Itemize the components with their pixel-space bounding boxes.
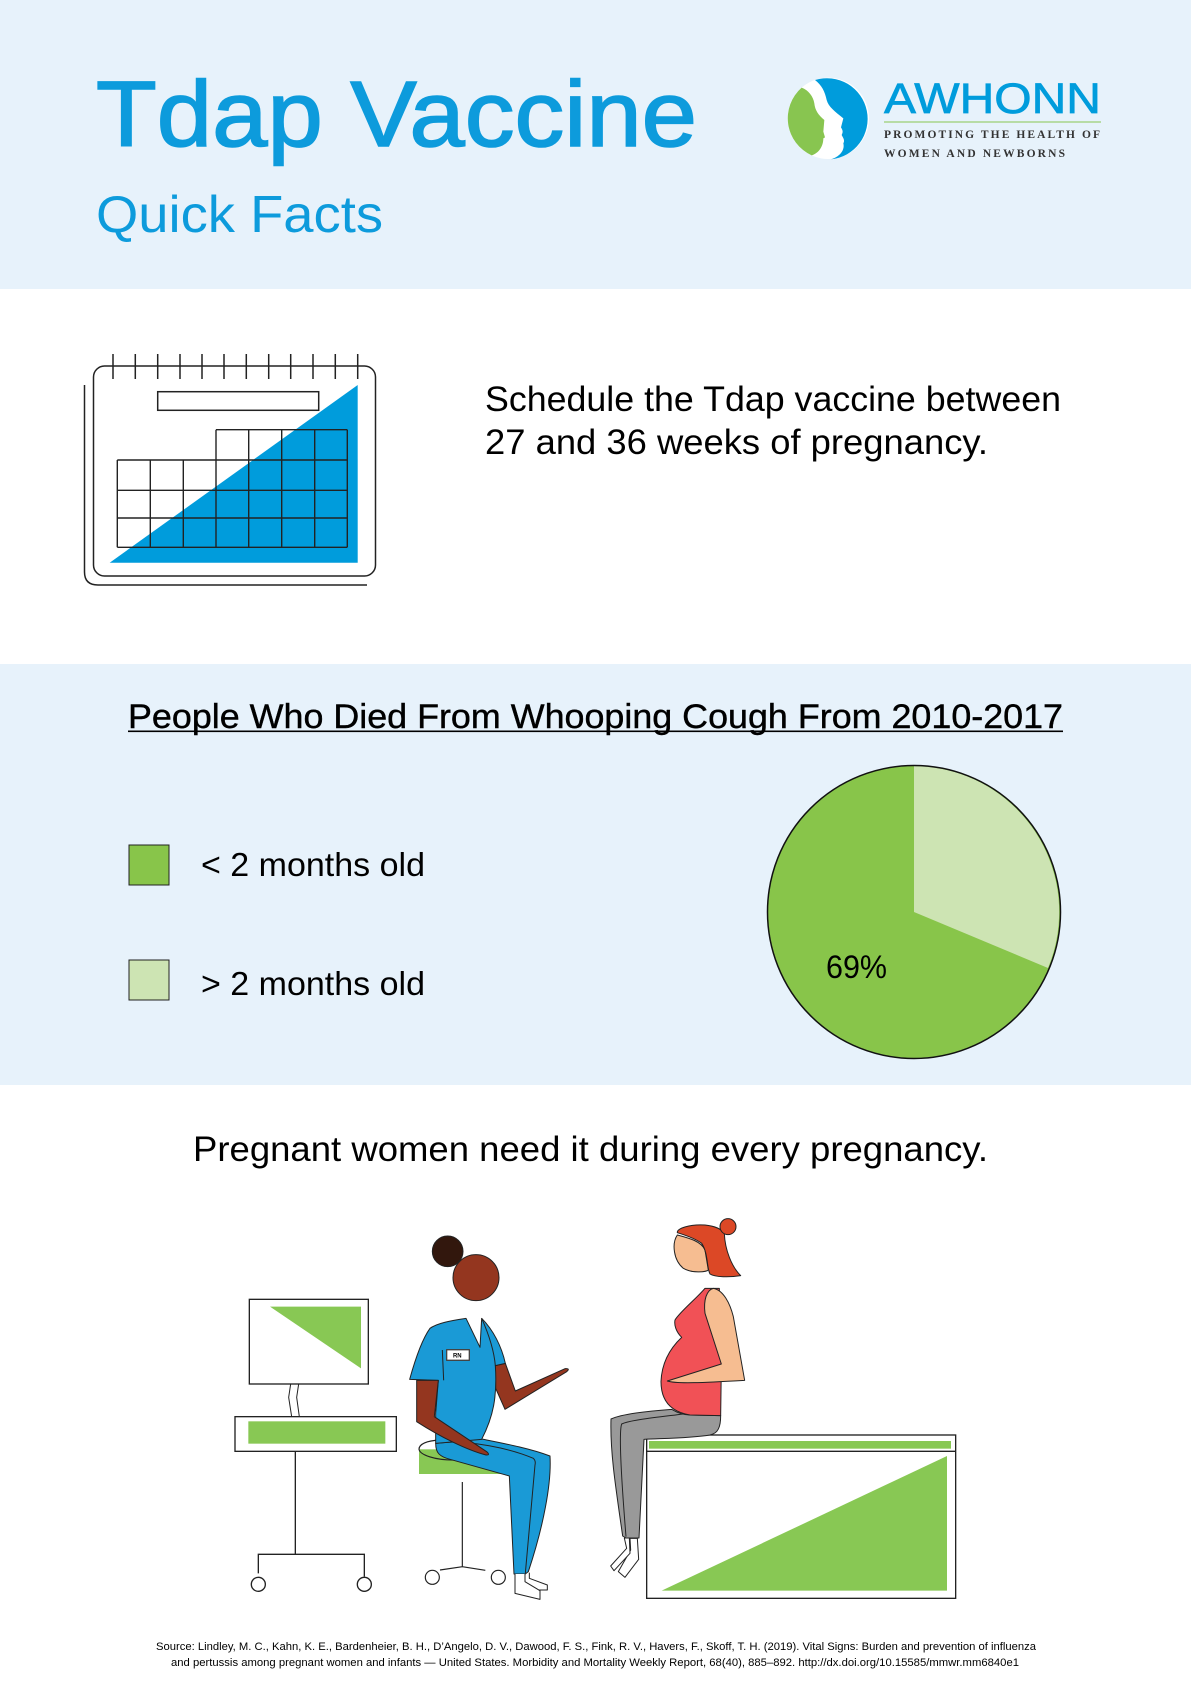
pie label: 69% (826, 949, 887, 985)
subtitle: Quick Facts (96, 186, 383, 244)
logo: AWHONN (788, 75, 1101, 160)
logo tagline: PROMOTING THE HEALTH OF (884, 129, 1100, 141)
computer cart (235, 1299, 396, 1591)
source citation: Source: Lindley, M. C., Kahn, K. E., Bardenheier, B. H., D’Angelo, D. V., Dawood, F. S., Fink, R. V., Havers, F., Skoff, T. H. (2019). Vital Signs: Burden and prevention of influenza (156, 1641, 1037, 1653)
icon: two face profiles (788, 78, 869, 159)
text: every pregnancy: Pregnant women need it during every pregnancy. (193, 1129, 988, 1169)
source citation: and pertussis among pregnant women and infants — United States. Morbidity and Mortality Weekly Report, 68(40), 885–892. http://dx.doi.org/10.15585/mmwr.mm6840e1 (171, 1657, 1019, 1669)
text: schedule (485, 379, 1061, 462)
icon: calendar (84, 354, 376, 585)
legend: over 2 months: > 2 months old (201, 965, 425, 1002)
title: Tdap Vaccine (96, 62, 697, 166)
text: schedule: Schedule the Tdap vaccine between (485, 379, 1061, 419)
pie chart (768, 766, 1060, 1058)
woman (611, 1219, 745, 1577)
chart heading: People Who Died From Whooping Cough From 2010-2017 (128, 698, 1063, 736)
panel: whooping cough deaths (0, 664, 1191, 1085)
logo tagline: WOMEN AND NEWBORNS (884, 148, 1065, 160)
stool (419, 1440, 506, 1584)
logo tagline (884, 129, 1100, 160)
legend: under 2 months: < 2 months old (201, 846, 425, 883)
nurse (410, 1236, 568, 1599)
legend: under 2 months (129, 845, 425, 885)
name badge (447, 1350, 469, 1360)
illustration: nurse and computer (235, 1236, 568, 1599)
text: schedule: 27 and 36 weeks of pregnancy. (485, 422, 988, 462)
name badge: RN (453, 1353, 462, 1359)
source citation (156, 1641, 1037, 1669)
illustration: pregnant woman on exam table (611, 1219, 956, 1598)
panel: header (0, 0, 1191, 289)
logo wordmark: AWHONN (884, 75, 1101, 123)
legend: over 2 months (129, 960, 425, 1002)
exam table (647, 1435, 956, 1598)
